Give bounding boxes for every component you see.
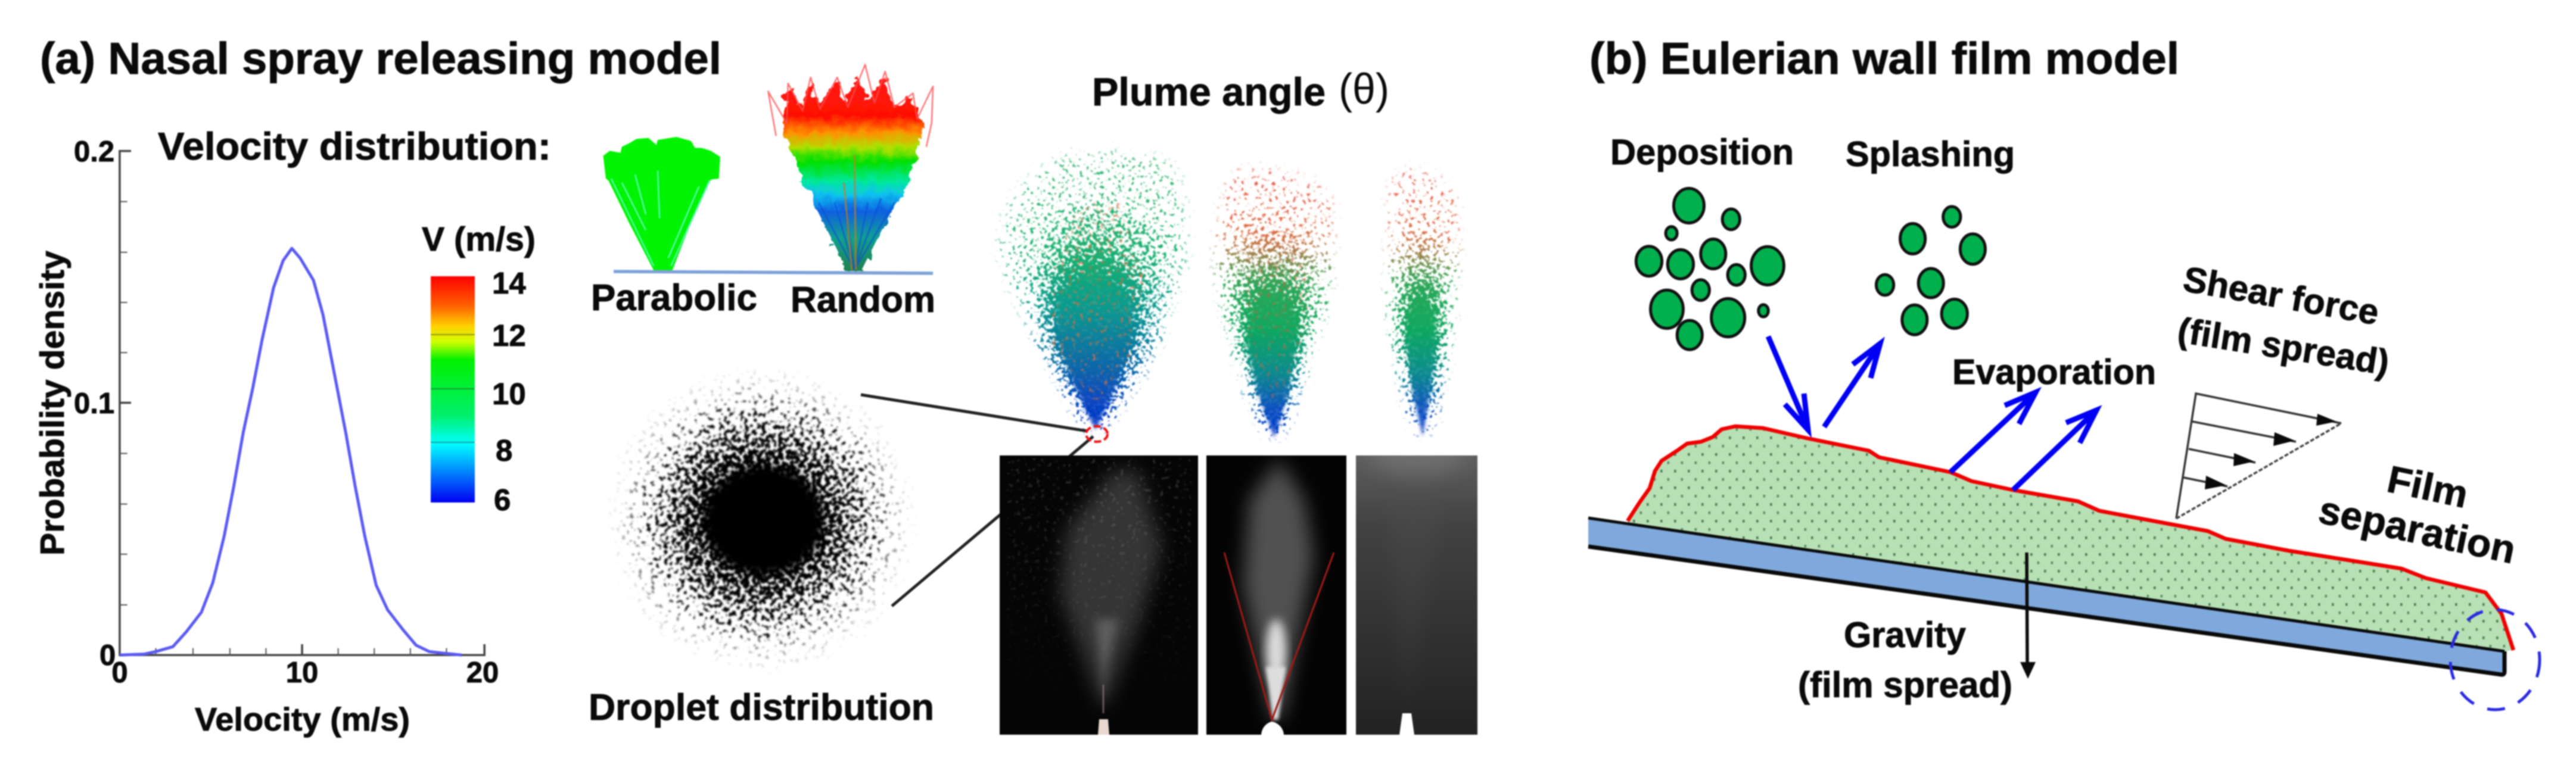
simulated plume: narrow angle xyxy=(1389,167,1457,436)
liquid film xyxy=(1588,426,2513,651)
heading: plume angle: Plume angle xyxy=(1092,70,1326,114)
arrow: evaporation left xyxy=(1950,392,2036,472)
label: splashing: Splashing xyxy=(1846,135,2015,174)
legend: velocity colour bar: 12 xyxy=(492,319,526,352)
label: film separation: Film xyxy=(2384,457,2472,516)
diagram: parabolic velocity fan: Parabolic xyxy=(591,277,757,319)
droplets: splashing xyxy=(1876,207,1985,335)
heading: plume angle: (θ) xyxy=(1339,65,1389,113)
y tick labels: 0.2 xyxy=(74,136,114,168)
panel b: Eulerian wall film model xyxy=(1588,33,2540,710)
diagram: parabolic velocity fan xyxy=(591,137,757,319)
label: shear force: (film spread) xyxy=(2175,310,2392,383)
label: gravity: (film spread) xyxy=(1798,665,2012,705)
x tick labels: 0 xyxy=(111,657,128,689)
photo: spray with plume angle lines xyxy=(1206,455,1346,735)
x tick labels: 20 xyxy=(466,657,499,689)
chart axes and ticks xyxy=(120,151,484,655)
label: deposition: Deposition xyxy=(1610,132,1794,172)
diagram: droplet distribution: Droplet distribution xyxy=(589,687,934,728)
legend: velocity colour bar: 8 xyxy=(496,433,512,467)
simulated plume: medium angle xyxy=(1217,169,1332,438)
nozzle marker xyxy=(1086,426,1107,442)
label: gravity xyxy=(1798,615,2012,705)
wall: blue substrate xyxy=(1588,518,2505,675)
heading: panel a: (a) Nasal spray releasing model xyxy=(40,33,721,83)
legend: velocity colour bar: V (m/s) xyxy=(422,220,536,258)
probability density curve xyxy=(120,248,462,655)
label: shear force xyxy=(2175,259,2392,383)
y tick labels: 0.1 xyxy=(74,388,114,420)
line chart: velocity probability density xyxy=(33,136,499,738)
panel a: nasal spray releasing model xyxy=(33,33,1477,738)
label: film separation: separation xyxy=(2315,487,2519,572)
legend: velocity colour bar: 6 xyxy=(494,483,511,517)
arrow: gravity xyxy=(2020,553,2036,679)
y axis label: Probability density xyxy=(33,251,71,555)
x tick labels: 10 xyxy=(286,657,318,689)
diagram: random velocity fan xyxy=(768,64,935,320)
legend: velocity colour bar xyxy=(422,220,536,517)
legend: velocity colour bar: 14 xyxy=(492,266,526,300)
heading: velocity distribution: Velocity distribution: xyxy=(158,124,551,168)
photo: spray wide angle xyxy=(1000,455,1198,735)
arrow: splashing xyxy=(1824,344,1880,427)
label: shear force: Shear force xyxy=(2180,259,2382,332)
y tick labels: 0 xyxy=(99,639,116,672)
fan base line xyxy=(614,271,933,273)
film separation marker xyxy=(2450,610,2540,710)
label: evaporation: Evaporation xyxy=(1952,352,2156,392)
y tick labels xyxy=(74,136,116,672)
arrow: deposition xyxy=(1768,336,1808,430)
connector lines: zoom from nozzle xyxy=(861,395,1093,606)
x tick labels xyxy=(111,657,499,689)
label: gravity: Gravity xyxy=(1844,615,1967,655)
legend: velocity colour bar: 10 xyxy=(492,377,526,411)
photo: spray narrow angle xyxy=(1356,435,1477,735)
droplets: deposition xyxy=(1636,188,1784,349)
x axis label: Velocity (m/s) xyxy=(195,701,410,738)
diagram: random velocity fan: Random xyxy=(791,279,935,320)
diagram: droplet distribution xyxy=(589,420,934,728)
simulated plume: wide angle xyxy=(1000,152,1186,430)
arrow: evaporation right xyxy=(2013,410,2096,490)
shear force profile xyxy=(2176,394,2341,519)
heading: panel b: (b) Eulerian wall film model xyxy=(1589,33,2179,83)
